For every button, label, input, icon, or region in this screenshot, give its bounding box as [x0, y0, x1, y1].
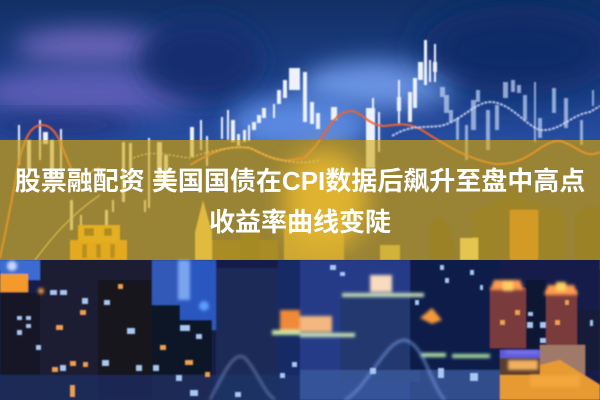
- city buildings: [0, 255, 600, 400]
- warm window lights: [52, 284, 569, 397]
- title: [15, 166, 585, 237]
- lit towers in band: [70, 190, 600, 260]
- title band: [0, 140, 600, 260]
- sky: [0, 0, 600, 270]
- title: 股票融配资 美国国债在CPI数据后飙升至盘中高点: [15, 166, 585, 196]
- faded candlesticks right: [440, 80, 594, 160]
- lit building details: [7, 260, 580, 400]
- window lights: [17, 265, 593, 397]
- title: 收益率曲线变陡: [209, 207, 391, 237]
- trend lines: [0, 102, 600, 260]
- candlestick chart: [18, 40, 437, 240]
- bright area under band centre: [283, 150, 367, 250]
- dark base under title band: [0, 140, 600, 260]
